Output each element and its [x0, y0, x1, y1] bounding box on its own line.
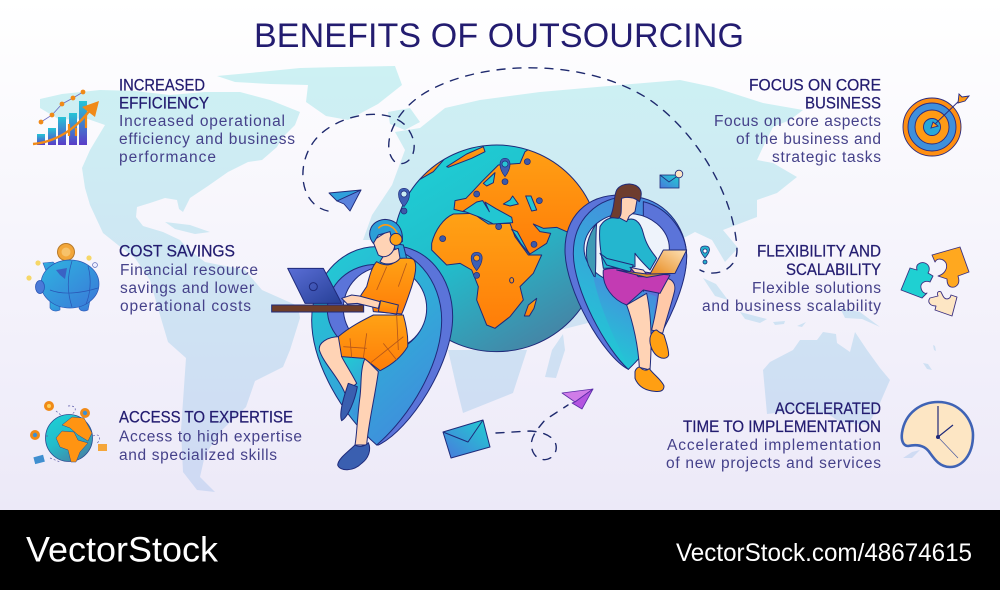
back leg and shoe [319, 337, 357, 393]
text: access to expertise: Access to high expertise [119, 428, 302, 446]
text: increased efficiency: efficiency and business [119, 131, 295, 148]
shorts [338, 315, 408, 371]
text: increased efficiency: INCREASED [119, 76, 205, 94]
map pins [399, 158, 510, 271]
laptop [288, 268, 342, 303]
landmass: africa [432, 213, 542, 328]
hand [342, 295, 380, 308]
text: accelerated time to implementation [666, 400, 881, 472]
envelope: small with notification [660, 170, 683, 188]
landmass: eurasia [454, 150, 589, 254]
text: access to expertise: ACCESS TO EXPERTISE [119, 408, 293, 426]
back hair [393, 243, 407, 260]
desk [272, 305, 364, 312]
text: cost savings: savings and lower [120, 280, 254, 297]
text: cost savings: operational costs [120, 298, 251, 315]
text: accelerated time to implementation: of new projects and services [666, 455, 881, 472]
paper plane: purple [562, 389, 593, 409]
text: cost savings: Financial resource [120, 262, 258, 279]
front leg and shoe [355, 358, 378, 445]
text: focus on core business [714, 76, 881, 166]
title: BENEFITS OF OUTSOURCING [254, 17, 744, 55]
flight path: envelope to plane [496, 405, 568, 460]
icon: piggy bank [26, 244, 99, 311]
text: accelerated time to implementation: TIME TO IMPLEMENTATION [683, 418, 881, 436]
icon: target with arrow [903, 94, 969, 156]
seas [463, 201, 513, 224]
sweater [358, 258, 416, 314]
shoes [650, 330, 669, 358]
neck and face [380, 248, 400, 264]
text: increased efficiency: Increased operational [119, 113, 285, 130]
flight path: top dashed arc [303, 68, 737, 273]
hair and head [618, 197, 637, 222]
text: increased efficiency [119, 76, 295, 166]
shorts [603, 268, 670, 305]
icon: small globe network [30, 401, 107, 464]
laptop [630, 267, 648, 277]
text: flexibility and scalability: FLEXIBILITY AND [757, 242, 881, 260]
icon: growth chart [33, 90, 99, 145]
madagascar [524, 298, 537, 316]
text: accelerated time to implementation: ACCELERATED [775, 400, 881, 418]
text: cost savings [119, 242, 258, 315]
headphones [390, 233, 402, 245]
text: increased efficiency: EFFICIENCY [119, 94, 209, 112]
world map [40, 66, 936, 492]
girl on left pin [272, 219, 453, 470]
footer logo text: VectorStock [26, 530, 219, 570]
hair [370, 219, 402, 243]
text: access to expertise [119, 408, 302, 464]
legs [652, 278, 675, 333]
text: focus on core business: of the business and [736, 131, 881, 148]
pin [565, 195, 643, 369]
woman on right pin [565, 184, 687, 391]
text: cost savings: COST SAVINGS [119, 242, 235, 260]
map dots [401, 159, 542, 278]
text: flexibility and scalability: Flexible solutions [752, 280, 881, 297]
text: access to expertise: and specialized skills [119, 447, 277, 464]
globe [396, 144, 590, 352]
pin [377, 246, 453, 445]
text: flexibility and scalability: SCALABILITY [786, 261, 881, 279]
icon: puzzle pieces [901, 247, 969, 316]
text: increased efficiency: performance [119, 149, 216, 166]
text: focus on core business: BUSINESS [805, 94, 881, 112]
paper plane: blue [329, 190, 361, 211]
text: flexibility and scalability [702, 242, 881, 315]
text: focus on core business: strategic tasks [772, 149, 881, 166]
footer band [0, 510, 1000, 590]
icon: melting clock [902, 402, 973, 467]
footer url text: VectorStock.com/48674615 [676, 539, 972, 567]
sweater [600, 218, 657, 270]
small pin [700, 246, 710, 264]
text: accelerated time to implementation: Accelerated implementation [667, 437, 881, 454]
envelope: large [443, 420, 490, 458]
text: focus on core business: Focus on core aspects [714, 113, 881, 130]
text: focus on core business: FOCUS ON CORE [749, 76, 881, 94]
greenland [447, 147, 485, 167]
text: flexibility and scalability: and business scalability [702, 298, 881, 315]
